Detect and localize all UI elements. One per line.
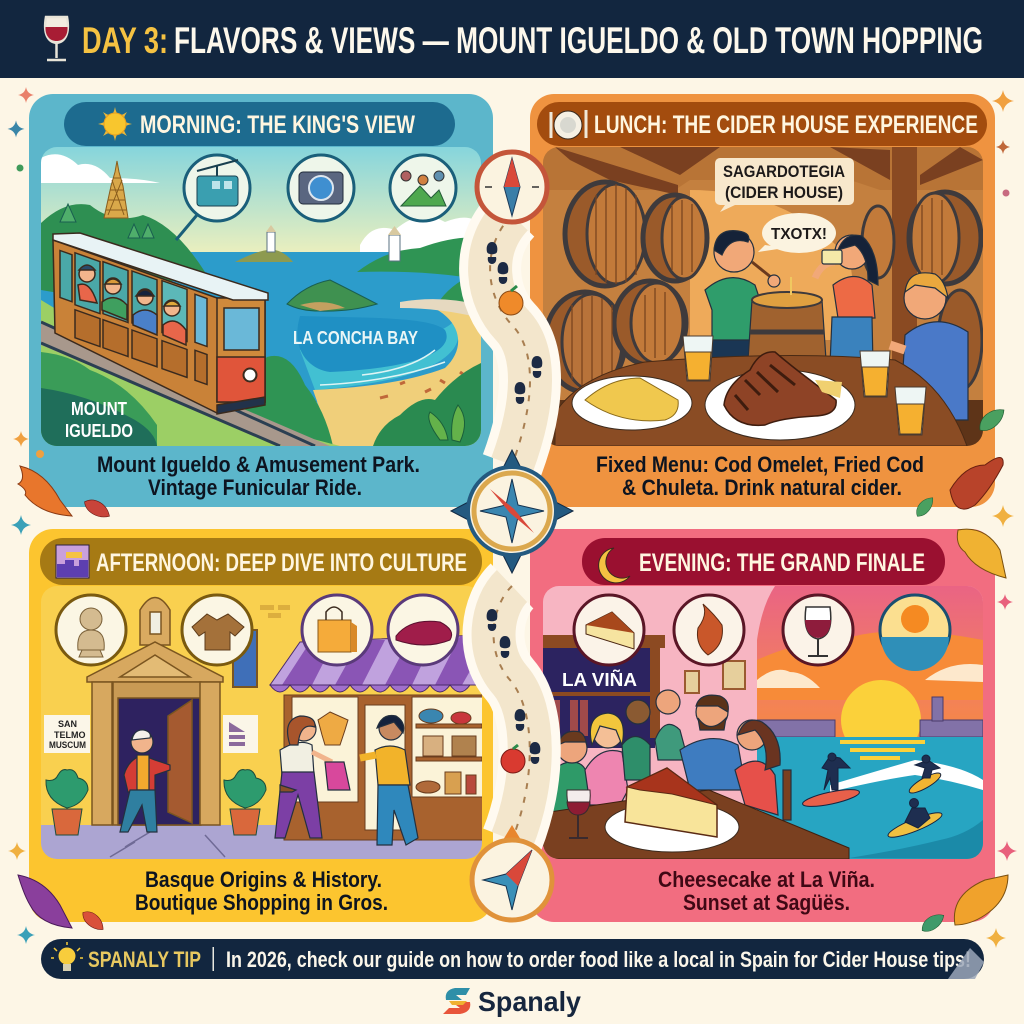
morning caption bbox=[97, 452, 420, 500]
lunch caption: Fixed Menu: Cod Omelet, Fried Cod bbox=[596, 452, 924, 477]
afternoon illustration bbox=[41, 586, 484, 859]
logo: spanaly: Spanaly bbox=[478, 986, 581, 1017]
icon circle: grilled food bbox=[674, 595, 744, 665]
icon circle: traditional shirt bbox=[182, 595, 252, 665]
icon: plate and cutlery bbox=[551, 110, 586, 139]
icon circle: cheesecake slice bbox=[574, 595, 644, 665]
winding footpath upper bbox=[487, 215, 542, 465]
foreground greenery bbox=[245, 356, 332, 444]
surfers bbox=[801, 753, 944, 841]
small island with lighthouse bbox=[235, 250, 293, 262]
winding footpath lower bbox=[487, 586, 540, 840]
man in blue shirt bbox=[890, 273, 968, 420]
afternoon caption bbox=[135, 867, 388, 915]
striped awning bbox=[270, 635, 482, 692]
glass of red wine bbox=[567, 790, 590, 838]
group of friends bbox=[545, 690, 791, 820]
footprints bbox=[487, 609, 540, 764]
la viña bar: LA VIÑA bbox=[562, 669, 637, 690]
plate with t-bone steak bbox=[705, 352, 855, 440]
folded corner bbox=[948, 948, 984, 979]
icon: city skyline bbox=[56, 545, 89, 578]
right headland bbox=[357, 238, 464, 276]
evening heading pill: EVENING: THE GRAND FINALE bbox=[639, 549, 925, 577]
leaf: small red bbox=[81, 496, 113, 522]
panel: lunch bbox=[530, 94, 995, 507]
speech bubble: sagardotegia: (CIDER HOUSE) bbox=[725, 183, 843, 202]
san telmo museum building bbox=[87, 598, 257, 825]
icon: wine glass bbox=[45, 17, 68, 60]
title: DAY 3: bbox=[82, 20, 168, 61]
icon circle: wine glass bbox=[783, 595, 853, 665]
morning caption: Vintage Funicular Ride. bbox=[148, 475, 362, 500]
sign: san telmo museum: TELMO bbox=[54, 730, 86, 740]
panel: morning bbox=[29, 94, 493, 507]
evening caption bbox=[658, 867, 875, 915]
potted plants bbox=[46, 770, 266, 835]
label: la concha bay: LA CONCHA BAY bbox=[293, 328, 418, 348]
evening heading pill bbox=[582, 538, 945, 585]
afternoon caption: Boutique Shopping in Gros. bbox=[135, 890, 388, 915]
icon: sun bbox=[91, 100, 139, 148]
leaf: orange left bbox=[18, 466, 72, 516]
small barrel bbox=[748, 277, 826, 360]
man in green shirt bbox=[705, 231, 780, 375]
plate with omelet bbox=[572, 376, 692, 430]
icon: crescent moon bbox=[599, 548, 630, 583]
evening caption: Cheesecake at La Viña. bbox=[658, 867, 875, 892]
leaf: green small bbox=[913, 494, 937, 520]
sign: cake bbox=[223, 715, 258, 753]
icon: apple bbox=[501, 745, 525, 773]
table bbox=[543, 790, 849, 859]
sign: san telmo museum bbox=[44, 715, 90, 753]
icon circle: bust bbox=[56, 595, 126, 665]
morning heading pill bbox=[64, 100, 455, 148]
lunch heading pill bbox=[537, 102, 987, 146]
green hill bbox=[41, 204, 205, 300]
icon circle: camera bbox=[288, 155, 354, 221]
woman in yellow sweater bbox=[360, 716, 418, 845]
afternoon heading pill: AFTERNOON: DEEP DIVE INTO CULTURE bbox=[96, 549, 467, 577]
morning illustration: IGUELDO bbox=[65, 421, 133, 441]
leaf: green lower right bbox=[918, 910, 947, 935]
speech bubble: txotx: TXOTX! bbox=[771, 226, 827, 243]
speech bubble: sagardotegia: SAGARDOTEGIA bbox=[723, 162, 845, 181]
speech bubble: txotx bbox=[758, 213, 836, 253]
footprints bbox=[487, 242, 542, 404]
glasses of cider bbox=[683, 336, 926, 435]
panel: afternoon bbox=[29, 529, 493, 922]
woman in orange shirt bbox=[815, 235, 878, 365]
morning caption: Mount Igueldo & Amusement Park. bbox=[97, 452, 420, 477]
tip label: SPANALY TIP bbox=[88, 947, 201, 972]
leaf: small red lower bbox=[79, 907, 107, 934]
icon circle: map pins and mountains bbox=[390, 155, 456, 221]
lunch caption: & Chuleta. Drink natural cider. bbox=[622, 475, 902, 500]
morning illustration bbox=[41, 147, 481, 446]
lunch caption bbox=[596, 452, 924, 500]
leaf: yellow upper right bbox=[957, 529, 1006, 578]
leaf: orange lower right bbox=[954, 875, 1008, 925]
decorative leaves bbox=[18, 404, 1008, 935]
wooden barrels bbox=[545, 182, 982, 392]
morning heading pill: MORNING: THE KING'S VIEW bbox=[140, 111, 415, 139]
icon: roasted peppers bbox=[950, 458, 1003, 509]
igueldo tower bbox=[104, 161, 128, 218]
la viña bar bbox=[543, 635, 665, 748]
icon circle: basque beret bbox=[388, 595, 458, 665]
lunch illustration bbox=[543, 147, 983, 446]
leaf: green right bbox=[975, 404, 1008, 435]
funicular car bbox=[53, 233, 268, 414]
icon: light bulb bbox=[51, 942, 83, 971]
light grass and track bbox=[41, 300, 340, 446]
man at museum door bbox=[120, 730, 170, 832]
wall pictures bbox=[685, 661, 745, 693]
central island bbox=[287, 280, 377, 311]
icon circle: shopping bag bbox=[302, 595, 372, 665]
woman with shopping bag bbox=[275, 716, 350, 838]
leaf: purple bbox=[18, 875, 72, 928]
bay shallows bbox=[300, 320, 459, 390]
evening caption: Sunset at Sagüës. bbox=[683, 890, 850, 915]
afternoon heading pill bbox=[40, 538, 482, 585]
sign: san telmo museum: SAN bbox=[58, 719, 77, 729]
tip bar bbox=[41, 939, 984, 979]
boutique shop bbox=[284, 695, 484, 840]
compass centre bbox=[451, 450, 573, 573]
icon circle: sunset over sea bbox=[880, 595, 950, 671]
panel: evening bbox=[530, 529, 995, 922]
sign: san telmo museum: MUSCUM bbox=[49, 740, 86, 750]
icon: orange bbox=[499, 286, 523, 315]
speech bubble: sagardotegia bbox=[715, 158, 854, 212]
icon circle: funicular bbox=[176, 155, 250, 240]
header banner bbox=[0, 0, 1024, 78]
evening illustration bbox=[543, 586, 983, 859]
table bbox=[555, 355, 967, 446]
compass top bbox=[477, 152, 547, 222]
morning illustration: MOUNT bbox=[71, 399, 127, 419]
afternoon caption: Basque Origins & History. bbox=[145, 867, 382, 892]
compass bottom bbox=[472, 825, 552, 920]
plate with cheesecake bbox=[605, 768, 739, 852]
